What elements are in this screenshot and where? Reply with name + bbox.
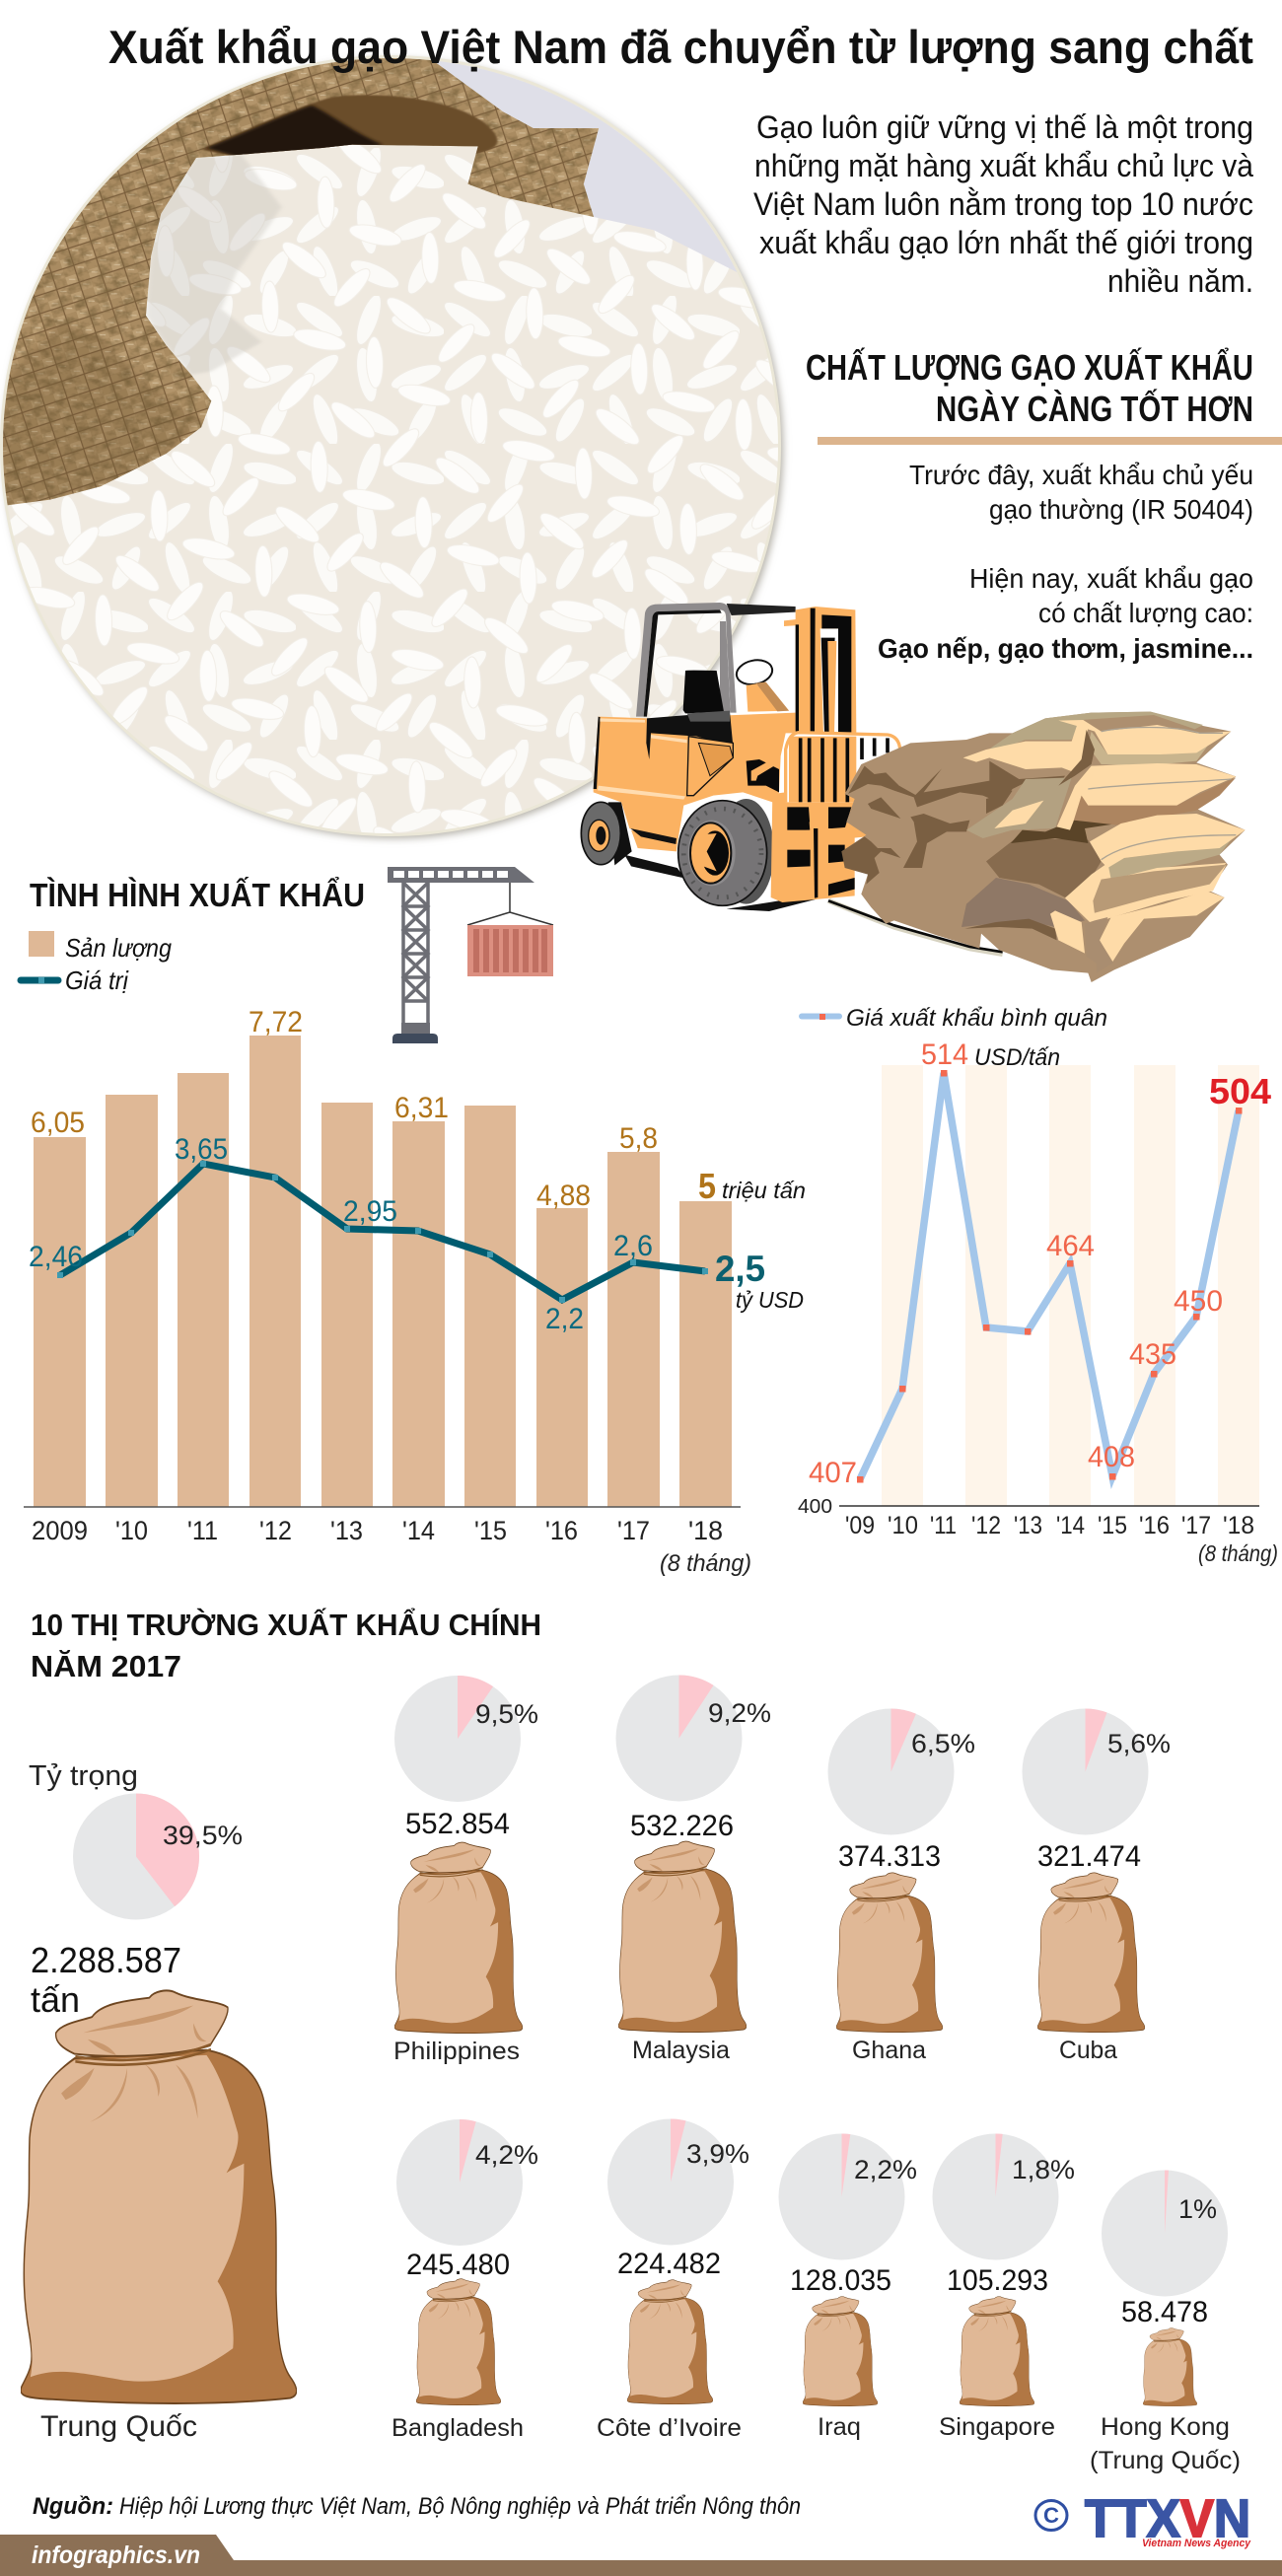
line chart: export value: 2,95 xyxy=(343,1195,397,1228)
x axis: years of volume chart: '12 xyxy=(259,1516,292,1545)
photo: rice in burlap sack xyxy=(0,0,805,848)
line chart: average export price xyxy=(809,1038,1271,1506)
legend: average export price: Giá xuất khẩu bình quân xyxy=(846,1005,1107,1032)
market: Singapore: Singapore xyxy=(939,2413,1055,2441)
text block: quality change: có chất lượng cao: xyxy=(1038,598,1253,628)
line chart: export value: 2,6 xyxy=(613,1230,653,1262)
source line: Nguồn: xyxy=(33,2493,113,2520)
market: Cuba: 321.474 xyxy=(1037,1840,1141,1873)
source line: Hiệp hội Lương thực Việt Nam, Bộ Nông nghiệp và Phát triển Nông thôn xyxy=(119,2493,801,2520)
line chart: export value: 2,5 xyxy=(715,1249,765,1289)
market: Bangladesh: Bangladesh xyxy=(392,2414,524,2442)
market: China: 2.288.587 xyxy=(31,1940,181,1980)
line chart: export value: tỷ USD xyxy=(736,1287,804,1313)
x axis: years of volume chart: '13 xyxy=(330,1516,363,1545)
text block: quality change: Trước đây, xuất khẩu chủ yếu xyxy=(909,460,1253,490)
illustration: sacks of rice xyxy=(828,712,1246,982)
market: Singapore: 1,8% xyxy=(1012,2155,1075,2184)
market: China: tấn xyxy=(31,1979,80,2020)
x axis: years of volume chart: '17 xyxy=(617,1516,650,1545)
footer band: infographics.vn xyxy=(32,2541,200,2569)
text block: quality change: gạo thường (IR 50404) xyxy=(989,494,1253,525)
legend: volume and value: Giá trị xyxy=(65,966,129,995)
market: Cuba: 5,6% xyxy=(1107,1729,1171,1758)
market: Philippines: 9,5% xyxy=(475,1699,538,1729)
x axis: years of volume chart: '11 xyxy=(187,1516,218,1545)
market: China: Trung Quốc xyxy=(40,2410,197,2443)
x axis: years of price chart: '16 xyxy=(1139,1512,1170,1539)
intro text block: những mặt hàng xuất khẩu chủ lực và xyxy=(754,148,1253,183)
intro text block xyxy=(753,109,1253,299)
market: Malaysia: 9,2% xyxy=(708,1698,771,1728)
market: Iraq: 2,2% xyxy=(854,2155,917,2184)
market: Cote d'Ivoire xyxy=(597,2118,749,2442)
market: Hong Kong: (Trung Quốc) xyxy=(1090,2447,1241,2474)
line chart: average export price: USD/tấn xyxy=(974,1044,1060,1071)
market: Ghana: 374.313 xyxy=(838,1840,941,1873)
text block: quality change xyxy=(878,460,1253,664)
line chart: average export price: 408 xyxy=(1088,1441,1135,1473)
x axis: years of volume chart: '18 xyxy=(688,1516,723,1545)
market: China: Tỷ trọng xyxy=(29,1760,138,1792)
title: Xuất khẩu gạo Việt Nam đã chuyển từ lượng sang chất xyxy=(108,21,1253,73)
icon: crane with container xyxy=(388,867,553,1043)
x axis: years of price chart: '14 xyxy=(1056,1512,1085,1539)
heading: ten main markets xyxy=(31,1607,541,1683)
market: Hong Kong xyxy=(1090,2170,1241,2474)
market: Philippines xyxy=(393,1676,538,2065)
logo: TTXVN: TTXVN xyxy=(1085,2489,1250,2548)
text block: quality change: Gạo nếp, gạo thơm, jasmine... xyxy=(878,633,1253,664)
x axis: years of price chart: 400 xyxy=(798,1496,832,1518)
line chart: average export price: 435 xyxy=(1129,1338,1176,1371)
bar chart: export volume: 6,31 xyxy=(394,1092,449,1124)
x axis: years of price chart: '10 xyxy=(888,1512,918,1539)
market: Philippines: Philippines xyxy=(393,2038,520,2065)
heading: ten main markets: NĂM 2017 xyxy=(31,1649,181,1683)
market: Bangladesh: 245.480 xyxy=(406,2249,510,2281)
x axis: years of price chart: '18 xyxy=(1223,1512,1254,1539)
line chart: export value: 3,65 xyxy=(175,1133,228,1166)
x axis: years of price chart: '13 xyxy=(1014,1512,1042,1539)
logo: TTXVN: Vietnam News Agency xyxy=(1142,2538,1251,2549)
line chart: average export price: 464 xyxy=(1046,1230,1095,1262)
market: Hong Kong: 58.478 xyxy=(1121,2296,1208,2328)
footer band xyxy=(0,2535,1282,2576)
text block: quality change: Hiện nay, xuất khẩu gạo xyxy=(969,563,1253,594)
market: Cote d'Ivoire: 224.482 xyxy=(617,2248,721,2280)
bar chart: export volume: triệu tấn xyxy=(722,1178,806,1203)
market: Malaysia: 532.226 xyxy=(630,1810,734,1842)
bar chart: export volume: 6,05 xyxy=(31,1107,85,1139)
x axis: years of price chart: '17 xyxy=(1181,1512,1211,1539)
x axis: years of price chart xyxy=(798,1496,1278,1566)
x axis: years of price chart: '11 xyxy=(930,1512,957,1539)
market: Malaysia: Malaysia xyxy=(632,2037,730,2064)
bar chart: export volume: 5,8 xyxy=(619,1122,658,1155)
x axis: years of volume chart: '14 xyxy=(402,1516,435,1545)
market: Bangladesh: 4,2% xyxy=(475,2140,538,2170)
heading: ten main markets: 10 THỊ TRƯỜNG XUẤT KHẨU CHÍNH xyxy=(31,1607,541,1642)
line chart: average export price: 407 xyxy=(809,1457,857,1489)
market: Iraq xyxy=(779,2134,917,2441)
line chart: export value xyxy=(29,1133,804,1335)
legend: volume and value xyxy=(21,931,172,995)
x axis: years of volume chart: '16 xyxy=(545,1516,578,1545)
market: Ghana: Ghana xyxy=(852,2037,926,2064)
heading: export rice quality xyxy=(806,346,1253,429)
bar chart: export volume: 7,72 xyxy=(249,1006,303,1038)
x axis: years of price chart: '12 xyxy=(971,1512,1001,1539)
market: Singapore xyxy=(933,2134,1075,2441)
market: Bangladesh xyxy=(392,2119,538,2442)
line chart: average export price: 514 xyxy=(921,1038,968,1071)
intro text block: xuất khẩu gạo lớn nhất thế giới trong xyxy=(759,225,1253,260)
logo: TTXVN: C xyxy=(1043,2503,1059,2528)
x axis: years of volume chart xyxy=(32,1516,751,1577)
line chart: export value: 2,46 xyxy=(29,1241,83,1273)
intro text block: Gạo luôn giữ vững vị thế là một trong xyxy=(756,109,1253,145)
market: China xyxy=(21,1760,297,2443)
line chart: export value: 2,2 xyxy=(545,1303,584,1335)
x axis: years of price chart: '15 xyxy=(1098,1512,1127,1539)
market: Malaysia xyxy=(615,1675,771,2064)
line chart: average export price: 450 xyxy=(1174,1285,1223,1318)
x axis: years of volume chart: 2009 xyxy=(32,1516,88,1545)
illustration: forklift xyxy=(581,603,900,911)
market: China: 39,5% xyxy=(163,1821,243,1850)
line chart: average export price: 504 xyxy=(1209,1071,1271,1111)
market: Cote d'Ivoire: 3,9% xyxy=(686,2139,749,2169)
x axis: years of volume chart: (8 tháng) xyxy=(660,1550,751,1577)
market: Iraq: 128.035 xyxy=(790,2264,891,2297)
market: Cote d'Ivoire: Côte d’Ivoire xyxy=(597,2414,742,2442)
market: Ghana xyxy=(828,1708,975,2064)
market: Cuba: Cuba xyxy=(1059,2037,1117,2064)
market: Iraq: Iraq xyxy=(818,2413,861,2441)
intro text block: nhiều năm. xyxy=(1107,263,1253,299)
market: Hong Kong: 1% xyxy=(1178,2194,1217,2224)
bar chart: export volume: 4,88 xyxy=(536,1180,591,1212)
bar chart: export volume: 5 xyxy=(698,1166,716,1206)
market: Philippines: 552.854 xyxy=(405,1808,510,1840)
intro text block: Việt Nam luôn nằm trong top 10 nước xyxy=(753,186,1253,222)
bar chart: export volume xyxy=(24,1006,806,1507)
x axis: years of volume chart: '15 xyxy=(474,1516,507,1545)
heading: export situation: TÌNH HÌNH XUẤT KHẨU xyxy=(30,877,365,913)
market: Singapore: 105.293 xyxy=(947,2264,1048,2297)
market: Cuba xyxy=(1022,1708,1171,2064)
market: Ghana: 6,5% xyxy=(911,1729,975,1758)
market: Hong Kong: Hong Kong xyxy=(1101,2413,1230,2441)
x axis: years of volume chart: '10 xyxy=(115,1516,148,1545)
legend: volume and value: Sản lượng xyxy=(65,933,172,963)
x axis: years of price chart: '09 xyxy=(845,1512,875,1539)
